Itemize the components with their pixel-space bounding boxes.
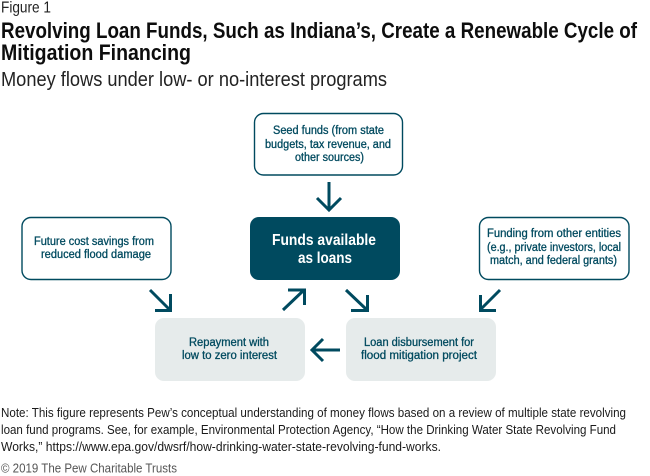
box: seed funds: budgets, tax revenue, and [265,139,391,151]
box: funds available as loans: Funds available [272,232,376,249]
box: funds available as loans [250,217,400,280]
box: seed funds [254,114,402,175]
box: funding from other entities: (e.g., private investors, local [487,242,621,254]
box: future cost savings [22,218,171,280]
arrow: funds available to loan disbursement [346,290,368,310]
note [1,406,626,454]
box: repayment: Repayment with [189,337,269,349]
box: funding from other entities [480,218,629,280]
box: future cost savings: reduced flood damage [41,249,151,261]
arrow: future savings to repayment [150,290,170,310]
box: funds available as loans: as loans [298,250,352,267]
arrow: loan disbursement to repayment [312,339,340,361]
box: repayment: low to zero interest [182,350,278,362]
arrow: other funding to loan disbursement [480,290,500,310]
copyright: © 2019 The Pew Charitable Trusts [1,460,177,476]
box: loan disbursement: Loan disbursement for [364,337,474,349]
figure label: Figure 1 [1,0,51,16]
arrow: seed funds to funds available [317,182,341,210]
box: seed funds: Seed funds (from state [273,125,384,137]
box: future cost savings: Future cost savings from [34,236,154,248]
box: funding from other entities: match, and federal grants) [490,255,617,267]
subtitle: Money flows under low- or no-interest programs [1,69,387,91]
title [1,18,638,65]
box: funding from other entities: Funding from other entities [487,228,621,240]
box: seed funds: other sources) [295,152,364,164]
box: loan disbursement: flood mitigation project [361,350,478,362]
note: Works,” https://www.epa.gov/dwsrf/how-drinking-water-state-revolving-fund-works. [1,440,441,454]
box: loan disbursement [346,318,496,381]
arrow: repayment to funds available [283,290,304,310]
note: loan fund programs. See, for example, Environmental Protection Agency, “How the Drinking Water State Revolving Fund [1,423,616,437]
box: repayment [155,318,305,381]
title: Mitigation Financing [1,40,191,65]
